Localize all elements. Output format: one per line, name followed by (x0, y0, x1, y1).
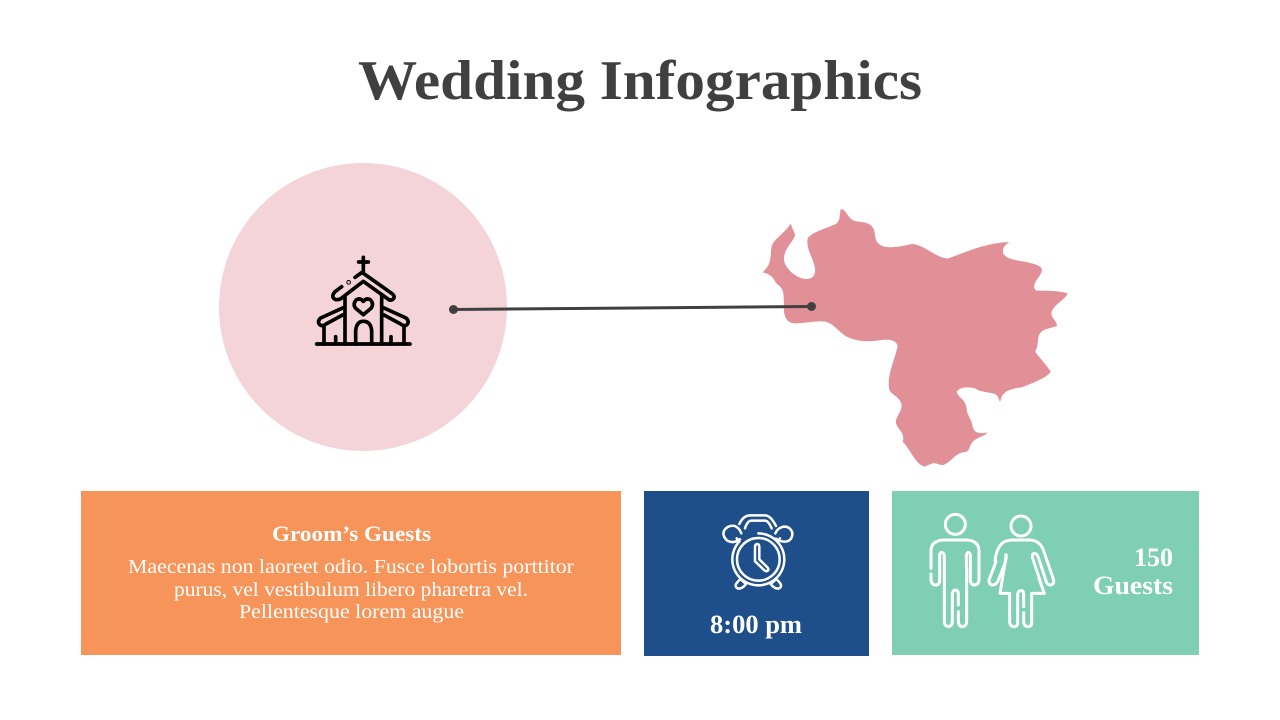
text block: description: Pellentesque lorem augue (239, 601, 464, 623)
map: Venezuela silhouette (763, 209, 1068, 467)
panel: groom's guests (81, 491, 621, 655)
text block: description (128, 556, 574, 623)
icon: man and woman (931, 514, 1054, 627)
heading: groom's guests: Groom’s Guests (272, 521, 431, 546)
panel: church circle (219, 163, 507, 451)
guest count (1093, 543, 1173, 600)
text block: description: Maecenas non laoreet odio. Fusce lobortis porttitor (128, 556, 574, 578)
time label: 8:00 pm (710, 610, 802, 639)
connector line with endpoints (449, 302, 816, 314)
icon: church (317, 257, 410, 344)
guest count: Guests (1093, 571, 1173, 600)
panel: guests (892, 491, 1199, 655)
text block: description: purus, vel vestibulum libero pharetra vel. (174, 579, 528, 601)
icon: alarm clock (723, 515, 792, 589)
title: Wedding Infographics (358, 50, 922, 112)
panel: time (644, 491, 869, 656)
guest count: 150 (1134, 543, 1173, 572)
